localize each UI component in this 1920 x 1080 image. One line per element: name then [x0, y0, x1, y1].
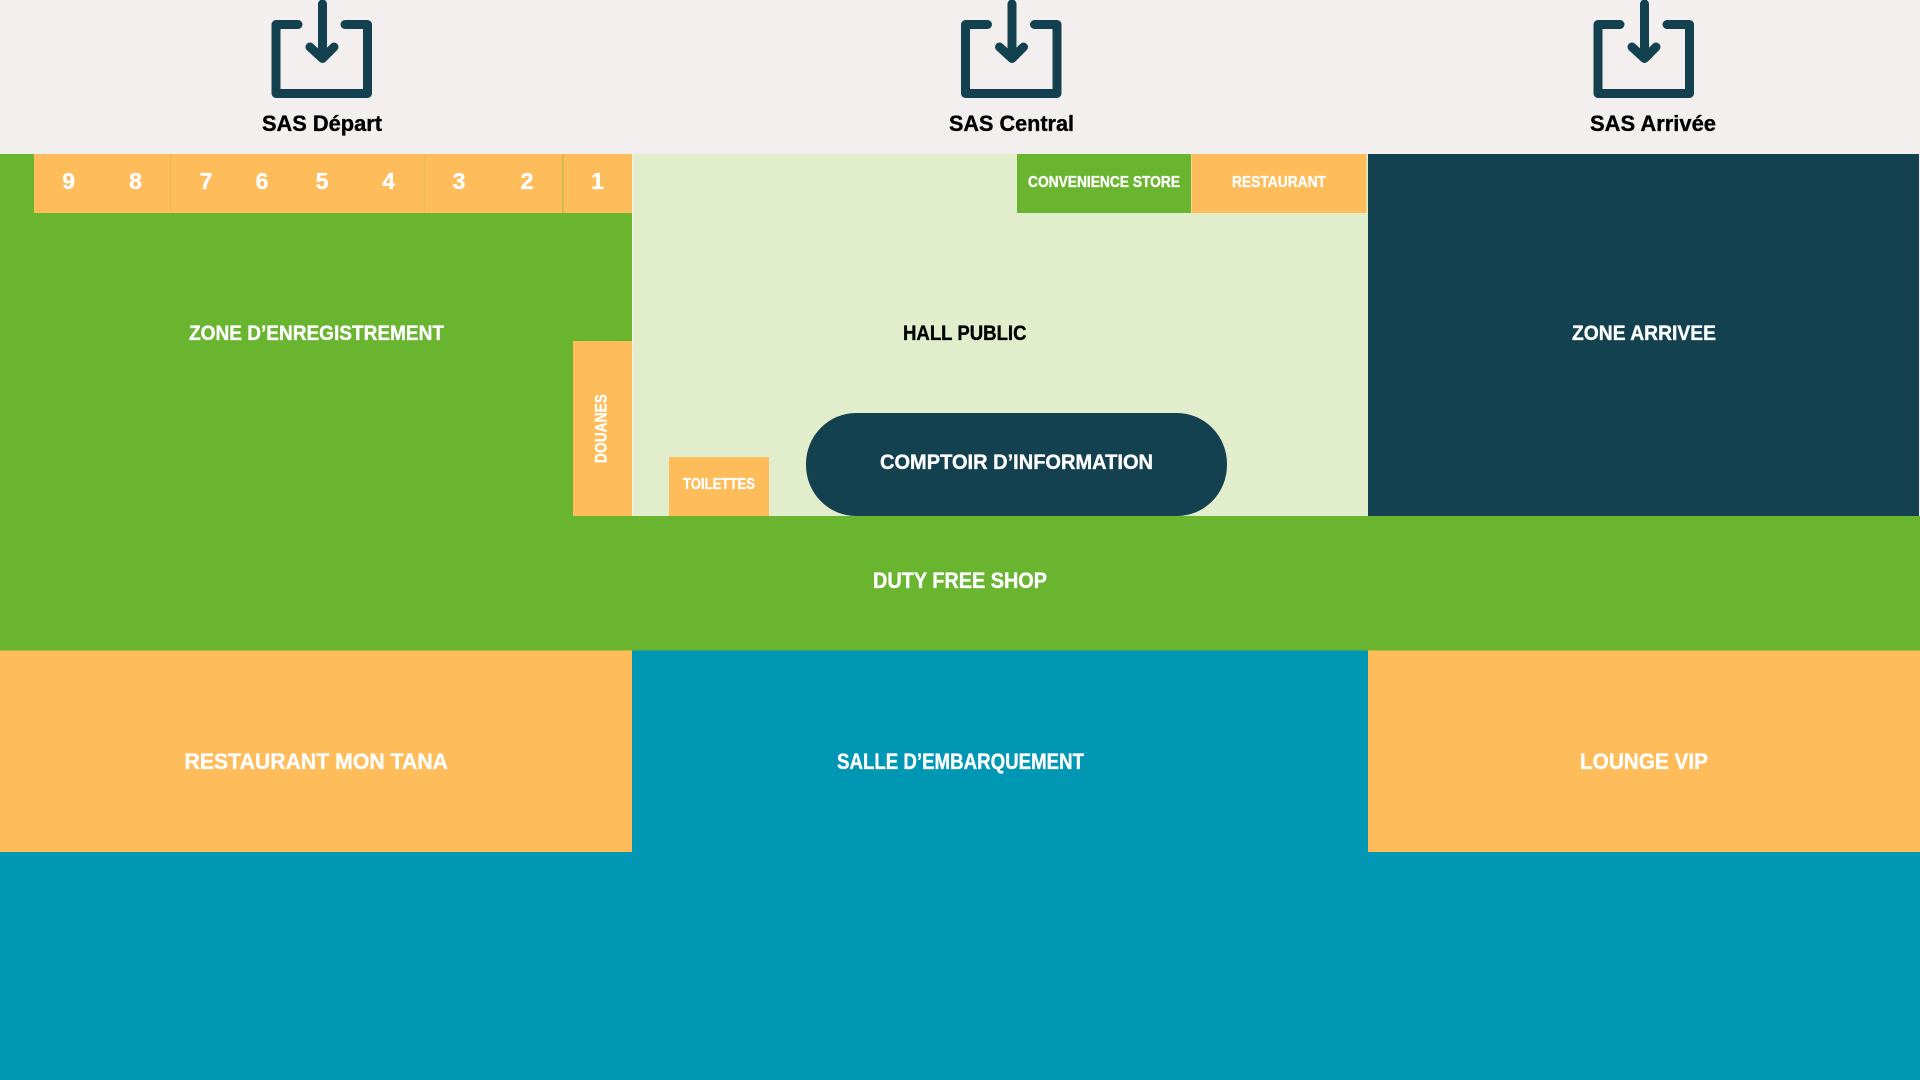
label: lounge vip: LOUNGE VIP	[1580, 749, 1708, 774]
label: zone d'enregistrement: ZONE D’ENREGISTREMENT	[189, 322, 444, 345]
label: SAS Central: SAS Central	[949, 111, 1074, 136]
label: restaurant mon tana: RESTAURANT MON TANA	[184, 749, 448, 774]
label: toilettes: TOILETTES	[683, 476, 755, 493]
icon: SAS Central download arrow	[966, 4, 1057, 94]
top band: SAS entrances	[0, 0, 1920, 154]
panel: restaurant	[1192, 154, 1366, 213]
counter numbers: 4	[382, 168, 395, 194]
icon: SAS Départ download arrow	[276, 4, 368, 94]
panel: restaurant mon tana	[0, 650, 632, 852]
label: hall public: HALL PUBLIC	[903, 322, 1026, 345]
counter numbers: 7	[200, 168, 212, 194]
panel: douanes	[573, 341, 632, 516]
icon: SAS Arrivée download arrow	[1598, 4, 1690, 94]
panel: hall public	[633, 154, 1368, 516]
counter numbers: 8	[129, 168, 142, 194]
counter numbers: 9	[62, 168, 75, 194]
panel: check-in counters 1 to 9	[34, 154, 632, 213]
counter numbers: 1	[591, 168, 604, 194]
label: convenience store: CONVENIENCE STORE	[1028, 174, 1180, 191]
label: SAS Arrivée: SAS Arrivée	[1590, 111, 1716, 136]
panel: comptoir d'information	[806, 413, 1227, 516]
counter numbers: 2	[521, 168, 533, 194]
counter numbers	[62, 168, 604, 194]
counter numbers: 6	[256, 168, 268, 194]
panel: zone d'enregistrement	[0, 154, 632, 516]
counter numbers: 3	[453, 168, 465, 194]
label: douanes: DOUANES	[592, 394, 610, 463]
label: SAS Départ: SAS Départ	[262, 111, 383, 136]
panel: duty free shop	[0, 516, 1920, 650]
label: salle d'embarquement: SALLE D’EMBARQUEMENT	[837, 749, 1084, 774]
panel: toilettes	[669, 457, 769, 516]
label: duty free shop: DUTY FREE SHOP	[873, 568, 1047, 593]
panel: lounge vip	[1368, 650, 1920, 852]
label: zone arrivee: ZONE ARRIVEE	[1572, 322, 1716, 345]
label: restaurant: RESTAURANT	[1232, 174, 1326, 191]
label: comptoir d'information: COMPTOIR D’INFORMATION	[880, 451, 1153, 474]
panel: convenience store	[1017, 154, 1191, 213]
panel: zone arrivee	[1368, 154, 1919, 516]
counter numbers: 5	[316, 168, 329, 194]
